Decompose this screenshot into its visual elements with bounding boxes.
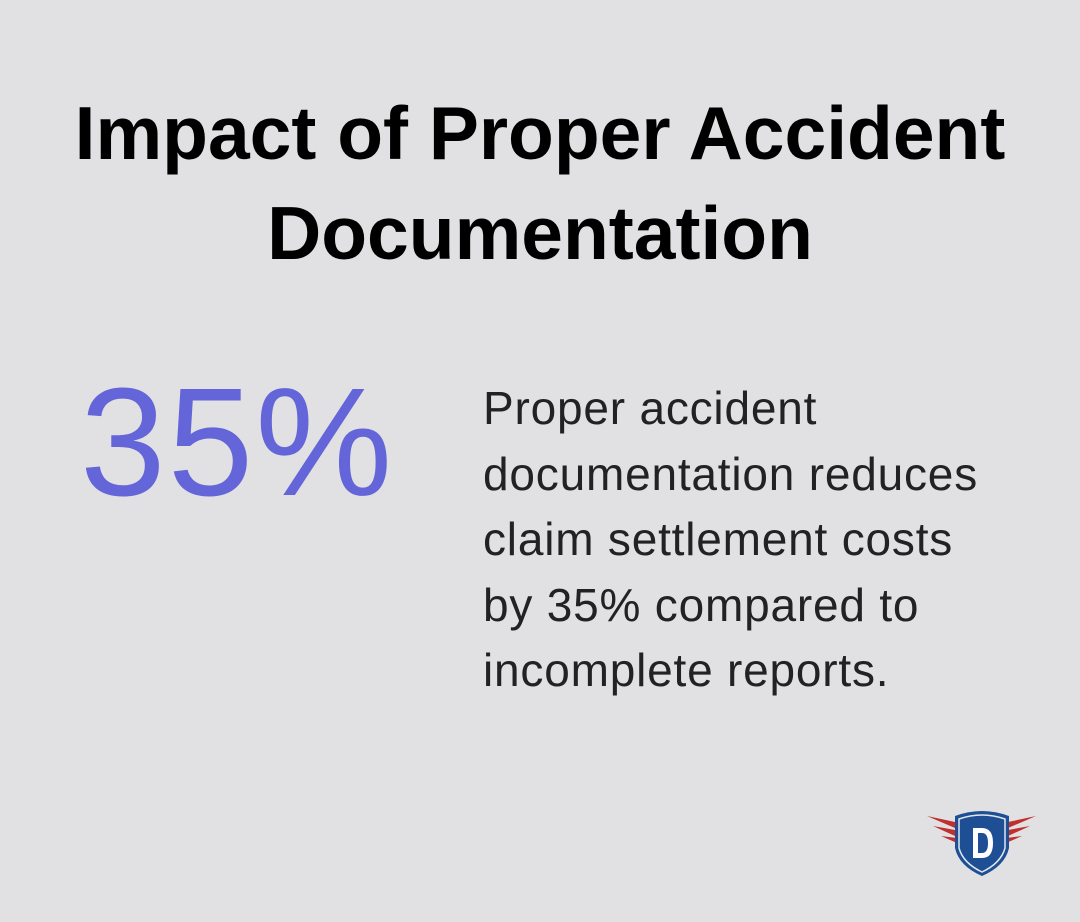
description text xyxy=(483,382,978,696)
icon: shield logo with wings xyxy=(927,811,1036,876)
title xyxy=(75,91,1005,275)
description text: Proper accident xyxy=(483,382,817,434)
description text: by 35% compared to xyxy=(483,578,919,630)
title: Documentation xyxy=(267,191,813,275)
description text: claim settlement costs xyxy=(483,513,953,565)
big stat: 35%: 35% xyxy=(80,356,394,528)
description text: documentation reduces xyxy=(483,448,978,500)
description text: incomplete reports. xyxy=(483,644,889,696)
title: Impact of Proper Accident xyxy=(75,91,1005,175)
